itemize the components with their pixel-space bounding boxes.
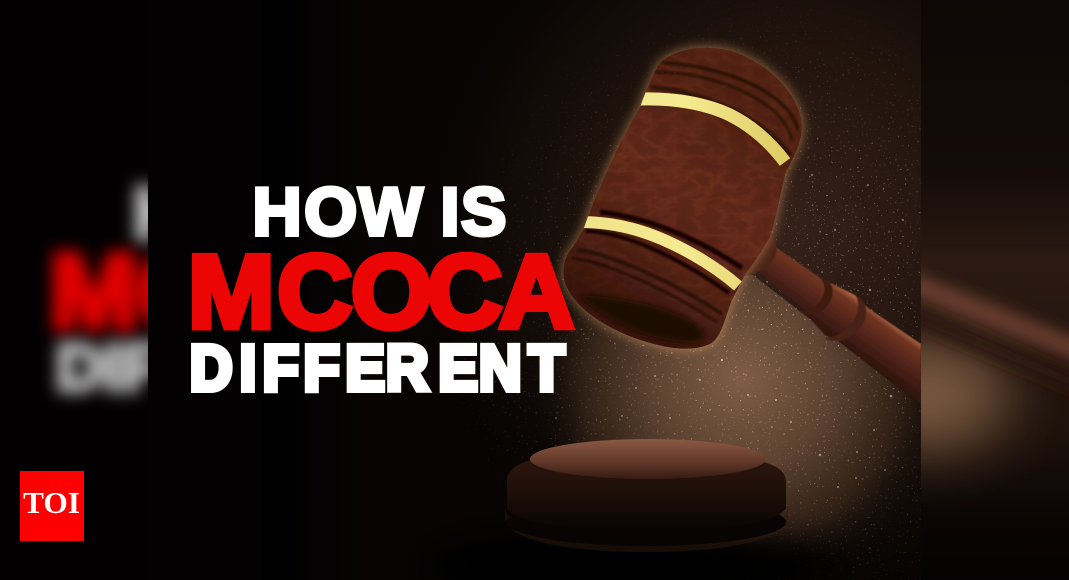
icon: gavel head	[560, 40, 805, 355]
star dust particles	[454, 2, 921, 580]
panel: right blurred side	[921, 0, 1069, 526]
ring one	[798, 278, 833, 314]
top gold band	[640, 99, 785, 162]
panel: left blurred side: H	[134, 174, 186, 254]
bottom gold band	[580, 222, 738, 286]
heading line: MCOCA: MCOCA	[188, 234, 574, 350]
collar	[747, 235, 776, 275]
shadow under block	[528, 522, 843, 580]
icon: TOI logo: TOI	[23, 485, 80, 520]
icon: sound block	[505, 439, 788, 552]
panel: left blurred side: MC	[50, 233, 215, 351]
panel: left blurred side: DIF	[56, 330, 162, 404]
ring two	[825, 295, 866, 341]
heading line: DIFFERENT: DIFFERENT	[190, 333, 565, 405]
heading line: HOW IS: HOW IS	[252, 174, 506, 250]
light beam under gavel	[560, 275, 912, 544]
icon: gavel handle	[740, 232, 921, 405]
panel: main photo	[438, 0, 921, 580]
panel: left blurred side	[40, 173, 148, 406]
icon: TOI logo	[20, 471, 84, 541]
title	[188, 174, 574, 405]
